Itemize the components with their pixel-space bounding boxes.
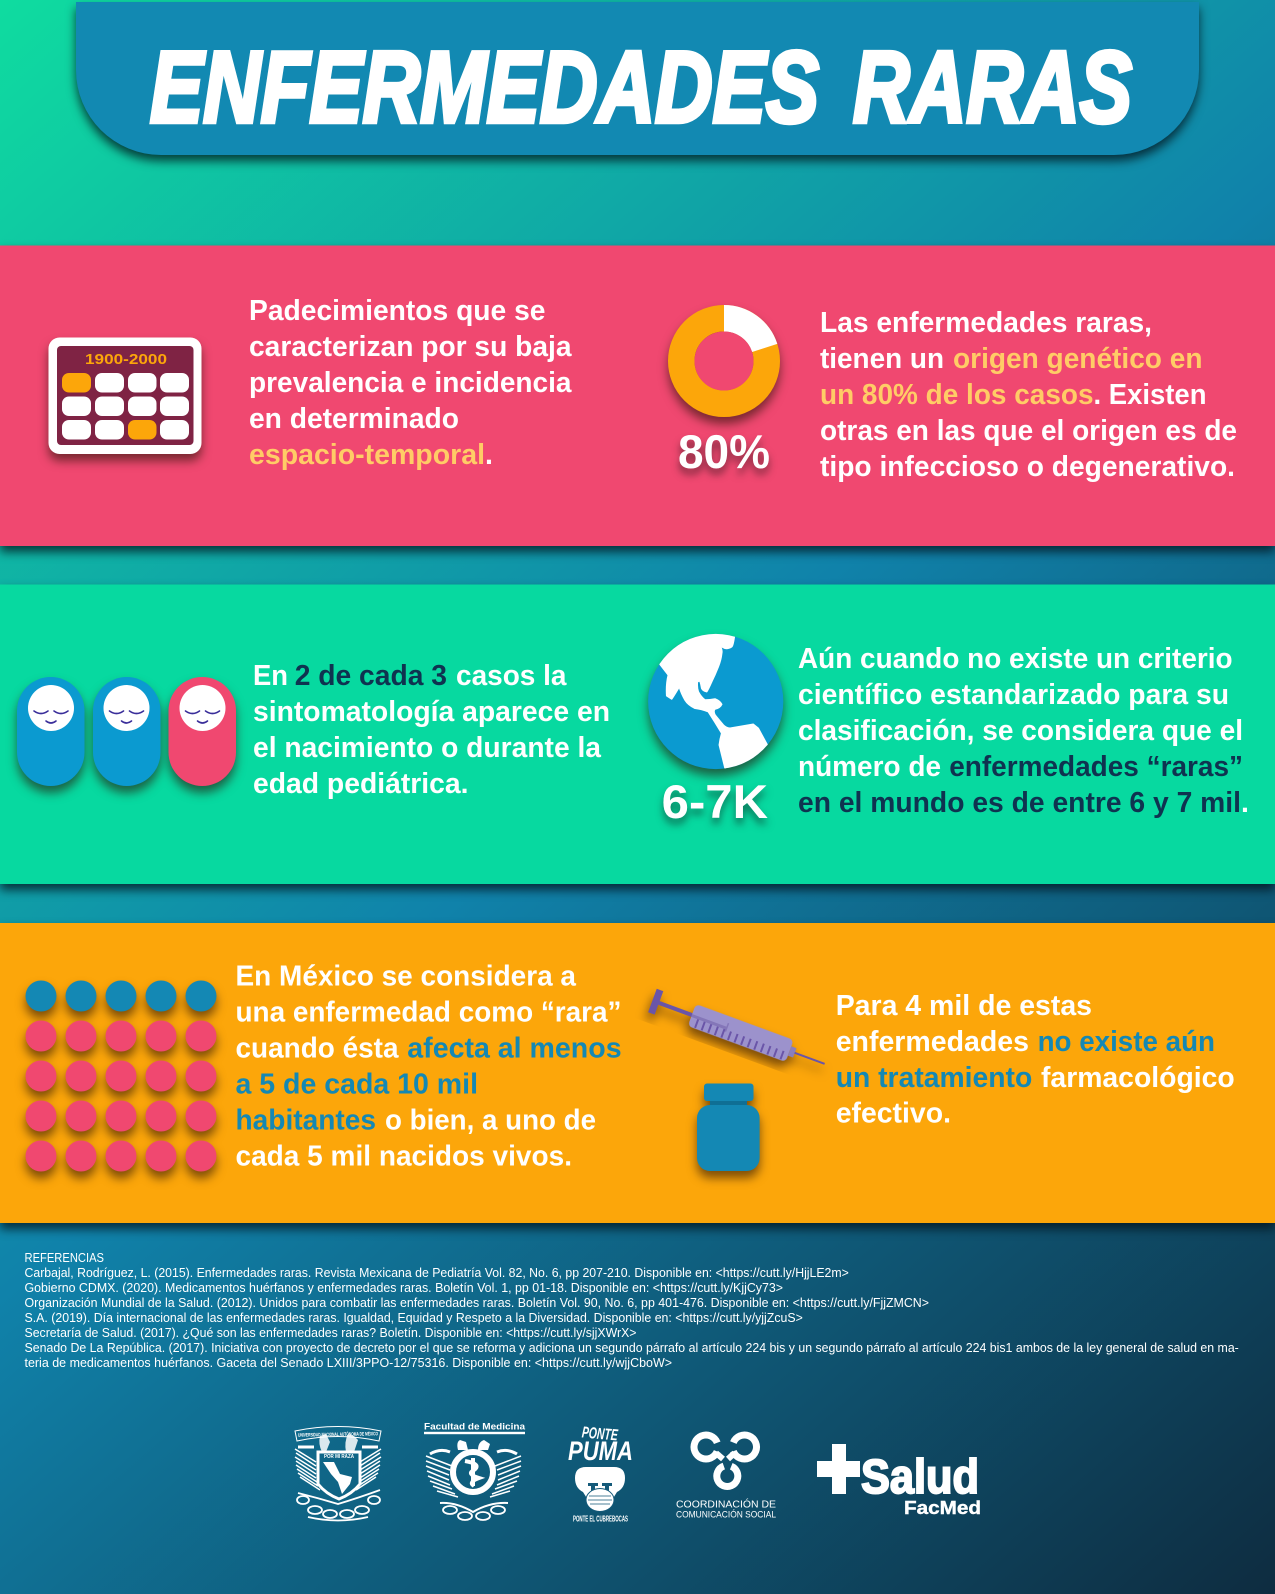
text: Mexico criterion: cuando ésta [236, 1032, 400, 1064]
text: genetic origin: tipo infeccioso o degenerativo. [820, 451, 1235, 483]
text: genetic origin [820, 307, 1237, 483]
number: 80%: 80% [678, 425, 770, 478]
text: Mexico criterion: En México se considera a [236, 960, 577, 992]
text: definition: Padecimientos que se [249, 295, 546, 327]
text: number of diseases: enfermedades “raras” [949, 751, 1243, 783]
logo: Salud FacMed: Salud [861, 1451, 979, 1504]
text: onset: el nacimiento o durante la [253, 732, 602, 764]
chart: dot matrix 5 of 25 [26, 980, 216, 1172]
title banner [76, 2, 1199, 155]
logo: Coordinación de Comunicación Social [676, 1431, 776, 1520]
logo: Facultad de Medicina: Facultad de Medicina [424, 1422, 526, 1432]
references: Gobierno CDMX. (2020). Medicamentos huérfanos y enfermedades raras. Boletín Vol. 1, pp 01-18. Disponible en: <https://cutt.ly/KjjCy73> [24, 1281, 783, 1295]
logo: Salud FacMed: FacMed [904, 1498, 981, 1518]
text: treatment: efectivo. [836, 1098, 951, 1130]
title: RARAS [853, 32, 1132, 144]
text: onset: casos la [456, 660, 568, 692]
references [24, 1251, 1239, 1370]
text: definition [249, 295, 573, 471]
text: genetic origin: origen genético en [953, 343, 1202, 375]
text: number of diseases: número de [798, 751, 941, 783]
logo: Coordinación de Comunicación Social: COMUNICACIÓN SOCIAL [676, 1510, 776, 1520]
references: teria de medicamentos huérfanos. Gaceta del Senado LXIII/3PPO-12/75316. Disponible en: <https://cutt.ly/wjjCboW> [24, 1356, 672, 1370]
text: number of diseases [798, 643, 1249, 819]
logo: UNAM crest [295, 1426, 381, 1520]
text: onset: En [253, 660, 288, 692]
text: treatment [836, 990, 1235, 1130]
text: number of diseases: Aún cuando no existe un criterio [798, 643, 1233, 675]
panel: orange Mexico and treatment [0, 923, 1275, 1223]
logo: Ponte Puma: PUMA [568, 1436, 633, 1466]
text: number of diseases: clasificación, se considera que el [798, 715, 1243, 747]
text: definition: prevalencia e incidencia [249, 367, 573, 399]
text: definition: en determinado [249, 403, 459, 435]
text: number of diseases: en el mundo es de entre 6 y 7 mil [798, 787, 1241, 819]
references: Organización Mundial de la Salud. (2012). Unidos para combatir las enfermedades raras. Boletín Vol. 90, No. 6, pp 401-476. Disponible en: <https://cutt.ly/FjjZMCN> [24, 1296, 929, 1310]
text: Mexico criterion [236, 960, 622, 1172]
references: Senado De La República. (2017). Iniciativa con proyecto de decreto por el que se reforma y adiciona un segundo párrafo al artículo 224 bis y un segundo párrafo al artículo 224 bis1 ambos de la ley general de salud en ma- [24, 1341, 1239, 1355]
references: Secretaría de Salud. (2017). ¿Qué son las enfermedades raras? Boletín. Disponible en: <https://cutt.ly/sjjXWrX> [24, 1326, 636, 1340]
icon: syringe [648, 989, 829, 1076]
logo: UNAM crest: UNIVERSIDAD NACIONAL AUTÓNOMA DE MÉXICO [298, 1429, 378, 1439]
logo: UNAM crest: POR MI RAZA [324, 1454, 354, 1460]
text: Mexico criterion: habitantes [236, 1104, 376, 1136]
text: Mexico criterion: a 5 de cada 10 mil [236, 1068, 478, 1100]
text: onset: sintomatología aparece en [253, 696, 610, 728]
text: genetic origin: . Existen [1094, 379, 1206, 411]
text: Mexico criterion: o bien, a uno de [385, 1104, 596, 1136]
logo: Ponte Puma [568, 1424, 633, 1524]
references: REFERENCIAS [24, 1251, 104, 1265]
text: onset: 2 de cada 3 [295, 660, 447, 692]
logo: Salud FacMed [817, 1444, 981, 1518]
icon: globe [648, 622, 783, 828]
logo: Facultad de Medicina [424, 1422, 526, 1520]
text: genetic origin: un 80% de los casos [820, 379, 1094, 411]
text: genetic origin: otras en las que el origen es de [820, 415, 1237, 447]
references: S.A. (2019). Día internacional de las enfermedades raras. Igualdad, Equidad y Respeto a la Diversidad. Disponible en: <https://cutt.ly/yjjZcuS> [24, 1311, 803, 1325]
icon: calendar: 1900-2000 [85, 351, 167, 368]
icon: medicine bottle [697, 1084, 760, 1171]
text: number of diseases: . [1241, 787, 1249, 819]
icon: calendar [48, 338, 202, 454]
title: ENFERMEDADES [150, 32, 819, 144]
text: treatment: farmacológico [1041, 1062, 1235, 1094]
panel: pink definition and genetic origin [0, 246, 1275, 546]
number: 6-7K: 6-7K [662, 775, 768, 828]
text: onset: edad pediátrica. [253, 768, 468, 800]
text: definition: caracterizan por su baja [249, 331, 573, 363]
logo: Ponte Puma: PONTE [581, 1424, 619, 1445]
text: Mexico criterion: una enfermedad como “rara” [236, 996, 622, 1028]
icon: three babies [17, 677, 236, 786]
text: treatment: enfermedades [836, 1026, 1029, 1058]
text: onset [253, 660, 610, 800]
text: definition: espacio-temporal [249, 439, 485, 471]
text: treatment: Para 4 mil de estas [836, 990, 1092, 1022]
text: genetic origin: Las enfermedades raras, [820, 307, 1152, 339]
text: Mexico criterion: cada 5 mil nacidos vivos. [236, 1140, 572, 1172]
text: Mexico criterion: afecta al menos [407, 1032, 622, 1064]
references: Carbajal, Rodríguez, L. (2015). Enfermedades raras. Revista Mexicana de Pediatría Vol. 82, No. 6, pp 207-210. Disponible en: <https://cutt.ly/HjjLE2m> [24, 1266, 849, 1280]
logo: Coordinación de Comunicación Social: COORDINACIÓN DE [676, 1498, 776, 1510]
panel: green onset and number of diseases [0, 584, 1275, 884]
text: treatment: un tratamiento [836, 1062, 1032, 1094]
logo: Ponte Puma: PONTE EL CUBREBOCAS [573, 1514, 628, 1524]
text: definition: . [485, 439, 493, 471]
text: genetic origin: tienen un [820, 343, 944, 375]
text: treatment: no existe aún [1038, 1026, 1215, 1058]
text: number of diseases: científico estandarizado para su [798, 679, 1229, 711]
chart: donut 80% [678, 318, 770, 478]
